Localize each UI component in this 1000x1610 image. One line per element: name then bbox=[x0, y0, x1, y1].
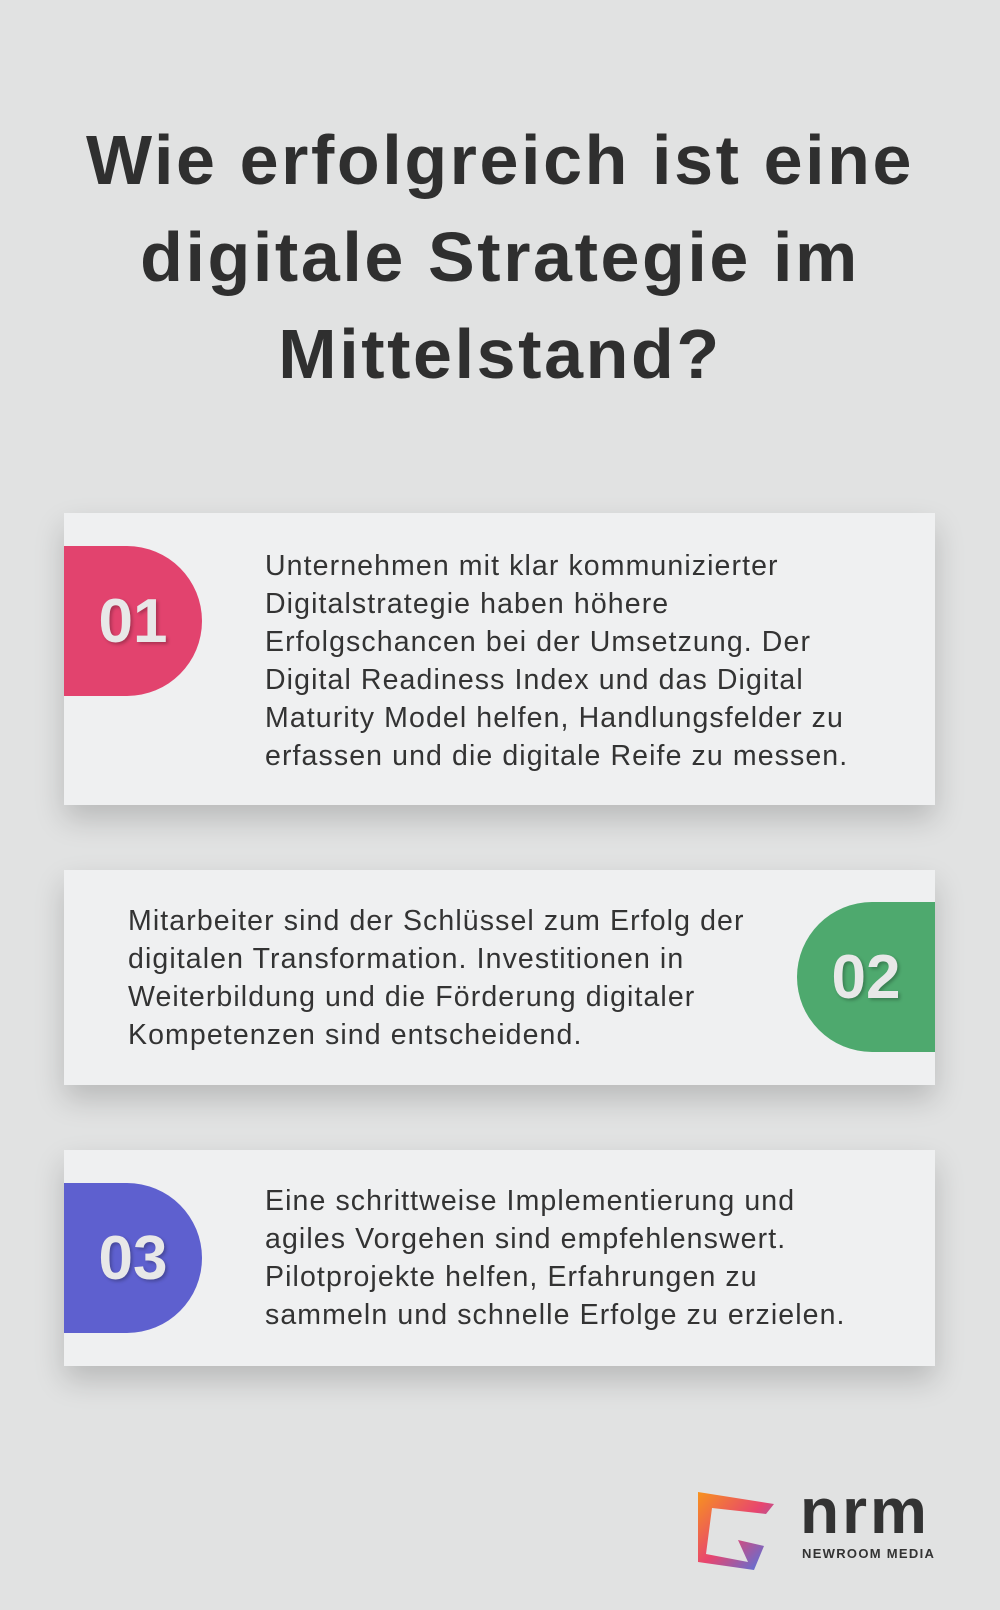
badge 01: 01 bbox=[99, 586, 167, 656]
logo text: nrm bbox=[800, 1475, 930, 1547]
logo: NEWROOM MEDIA bbox=[802, 1546, 935, 1561]
panel: card 2 bbox=[64, 870, 935, 1085]
title: Wie erfolgreich ist eine bbox=[86, 121, 914, 199]
badge 01 bbox=[64, 546, 202, 696]
text 1: Maturity Model helfen, Handlungsfelder zu bbox=[265, 702, 844, 734]
panel: card 3 bbox=[64, 1150, 935, 1366]
text 1: Digital Readiness Index und das Digital bbox=[265, 664, 804, 696]
logo bbox=[698, 1475, 935, 1570]
text 1: erfassen und die digitale Reife zu messen. bbox=[265, 740, 848, 772]
badge 03: 03 bbox=[99, 1224, 167, 1292]
text 3: Pilotprojekte helfen, Erfahrungen zu bbox=[265, 1261, 758, 1293]
text 3: agiles Vorgehen sind empfehlenswert. bbox=[265, 1223, 786, 1255]
text 2: Kompetenzen sind entscheidend. bbox=[128, 1019, 582, 1051]
title bbox=[86, 121, 914, 393]
text 1 bbox=[265, 550, 848, 772]
text 1: Erfolgschancen bei der Umsetzung. Der bbox=[265, 626, 811, 658]
text 3 bbox=[265, 1185, 846, 1331]
badge 02: 02 bbox=[832, 942, 900, 1012]
text 2 bbox=[128, 905, 745, 1051]
text 3: sammeln und schnelle Erfolge zu erzielen. bbox=[265, 1299, 846, 1331]
text 1: Unternehmen mit klar kommunizierter bbox=[265, 550, 779, 582]
text 2: digitalen Transformation. Investitionen in bbox=[128, 943, 684, 975]
text 3: Eine schrittweise Implementierung und bbox=[265, 1185, 795, 1217]
text 1: Digitalstrategie haben höhere bbox=[265, 588, 669, 620]
title: Mittelstand? bbox=[278, 315, 722, 393]
icon: logo mark bbox=[698, 1492, 774, 1570]
badge 03 bbox=[64, 1183, 202, 1333]
badge 02 bbox=[797, 902, 935, 1052]
panel: card 1 bbox=[64, 513, 935, 805]
text 2: Mitarbeiter sind der Schlüssel zum Erfolg der bbox=[128, 905, 745, 937]
text 2: Weiterbildung und die Förderung digitaler bbox=[128, 981, 695, 1013]
title: digitale Strategie im bbox=[140, 218, 860, 296]
